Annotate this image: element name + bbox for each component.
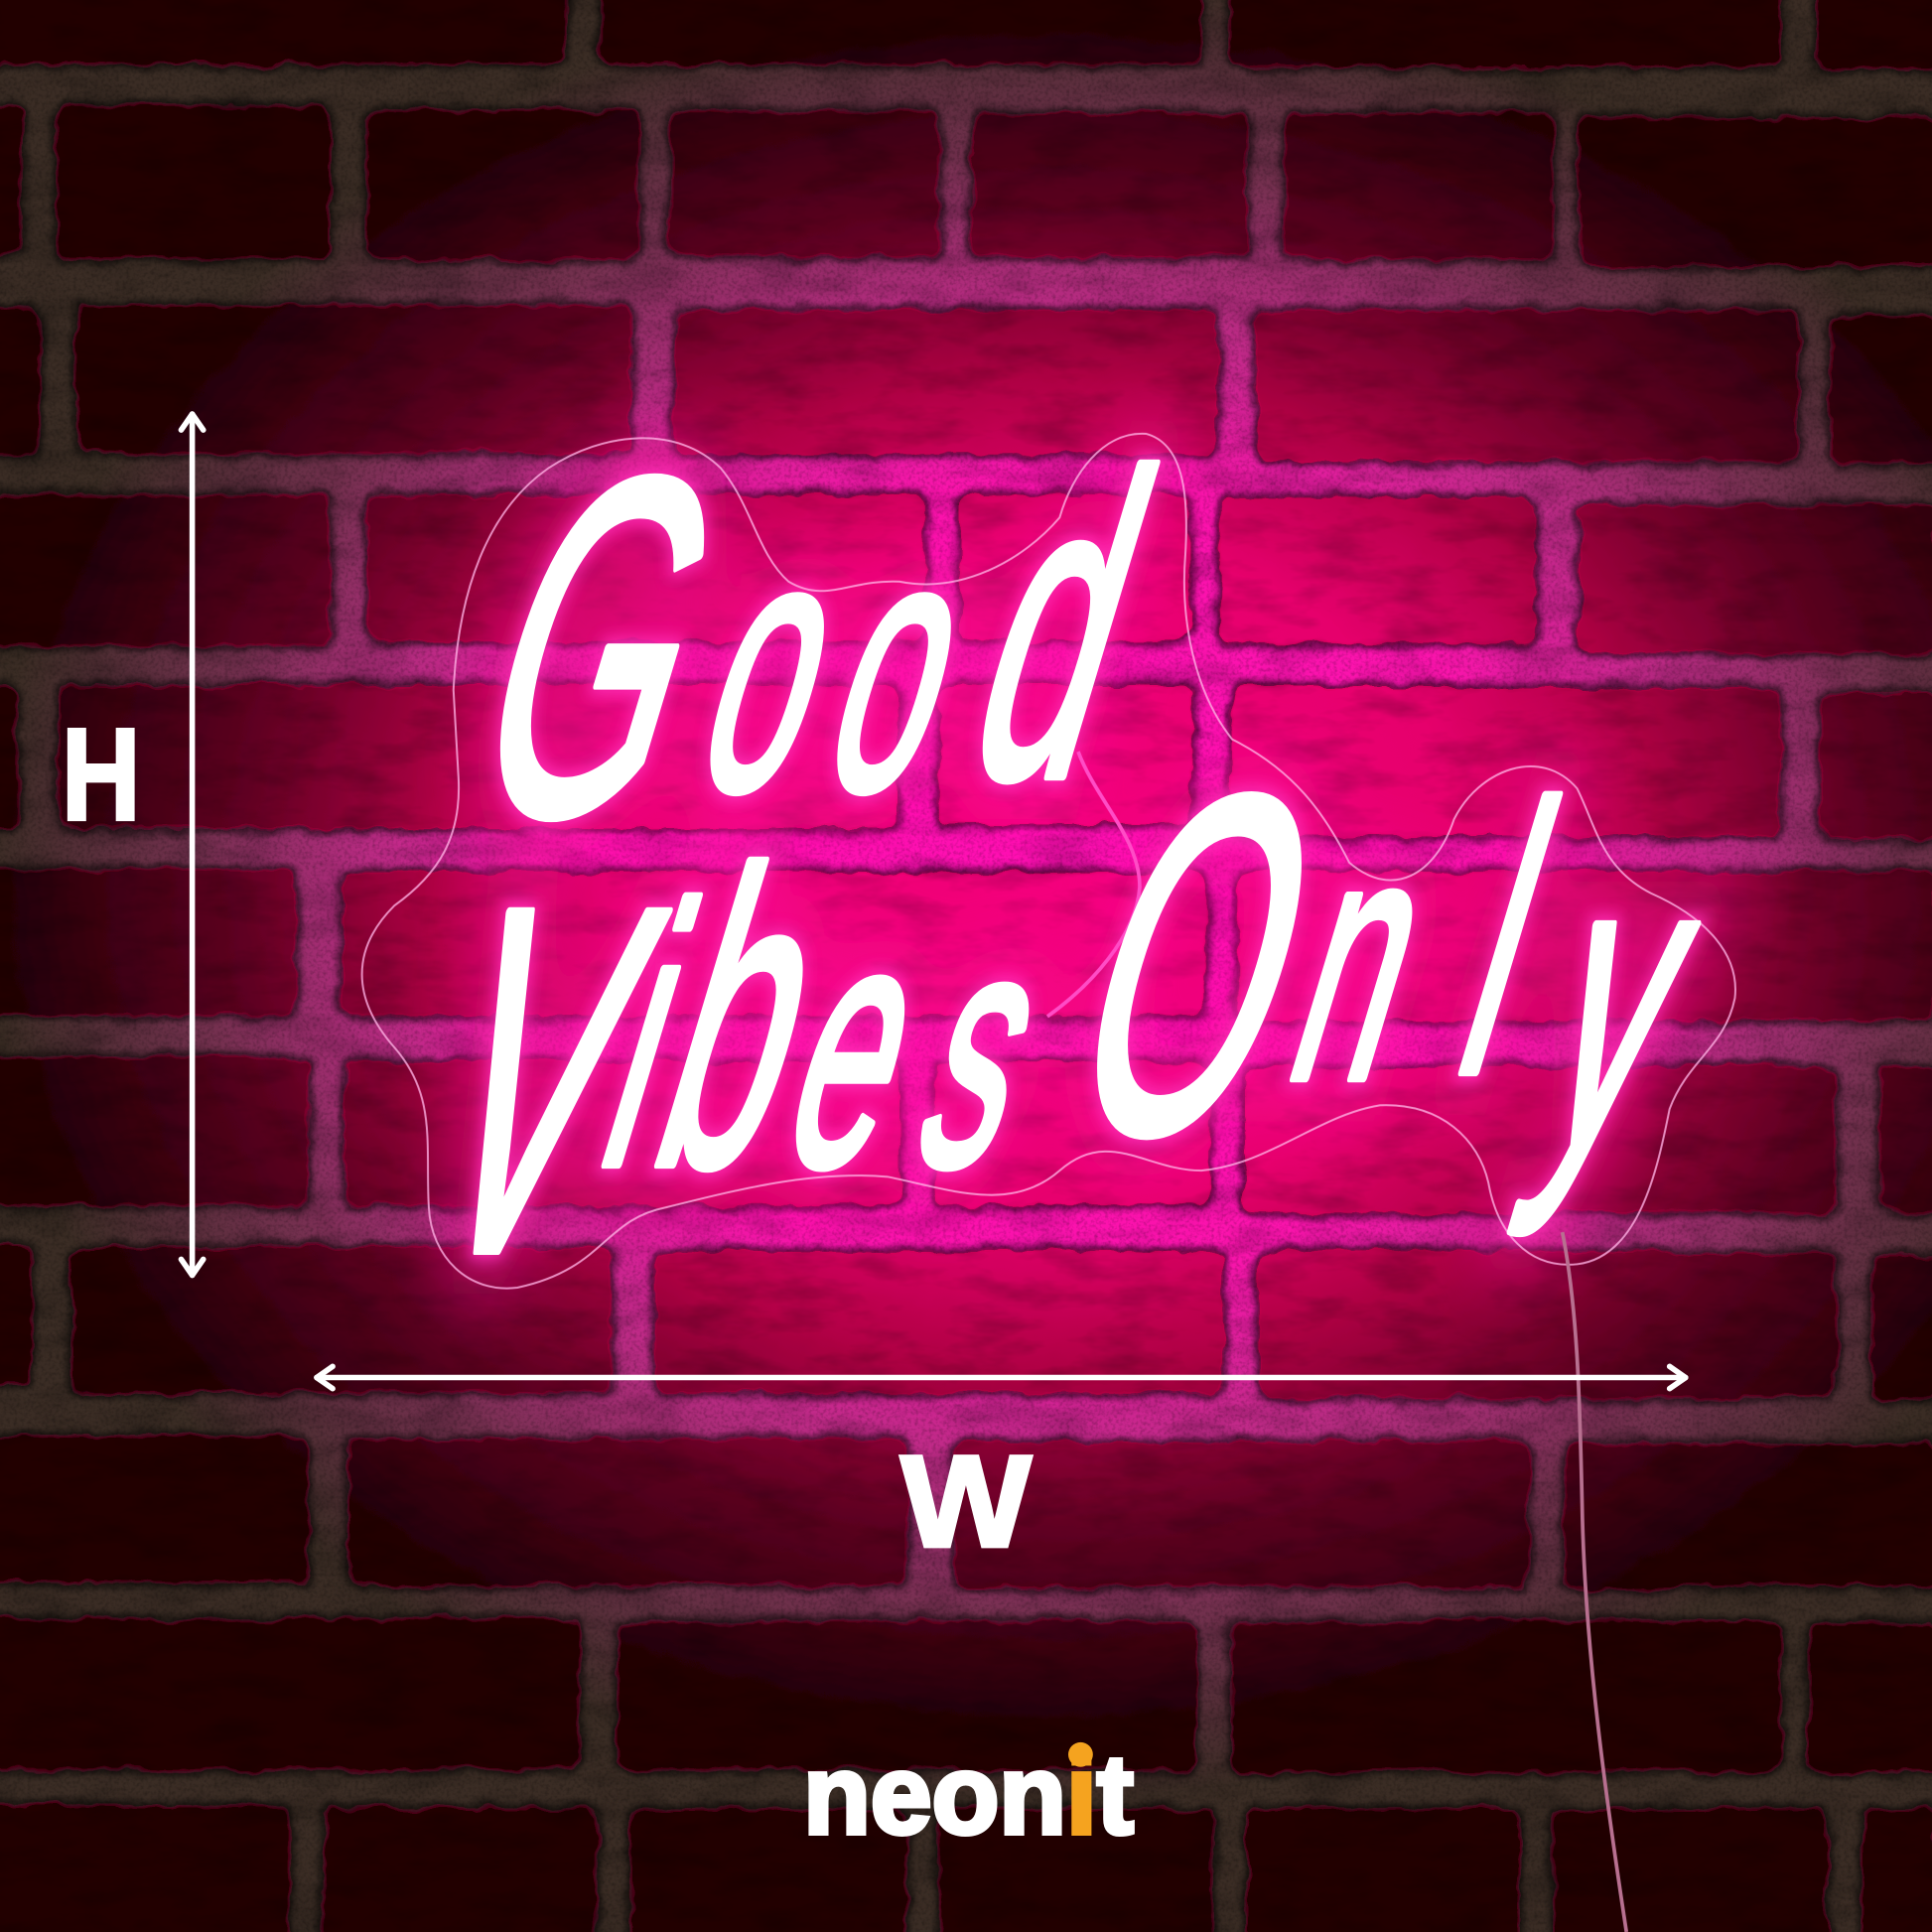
word: Vibes: V	[373, 805, 705, 1356]
height label: H	[62, 701, 140, 847]
neon glow wide: o	[792, 466, 1012, 865]
neon glow wide: o	[666, 466, 885, 865]
neon glow tight: G	[428, 378, 776, 915]
word: Only: O	[1026, 696, 1374, 1233]
width dimension arrow	[317, 1366, 1686, 1389]
neon glow wide	[373, 378, 1767, 1356]
neon glow wide: y	[1500, 767, 1746, 1238]
acrylic backing outline	[362, 434, 1735, 1289]
neon glow tight: o	[792, 466, 1012, 865]
neon glow wide: b	[617, 786, 874, 1254]
word: Good: o	[666, 466, 885, 865]
word: Vibes: i	[568, 830, 733, 1243]
neon glow tight: n	[1258, 767, 1469, 1152]
neon glow tight: l	[1424, 727, 1593, 1154]
neon glow tight: b	[617, 786, 874, 1254]
word: Good: d	[931, 387, 1195, 869]
word: Only: y	[1500, 767, 1746, 1238]
neon glow wide: e	[753, 854, 964, 1238]
neon glow tight: d	[931, 387, 1195, 869]
neon glow tight: e	[753, 854, 964, 1238]
neon glow wide: s	[887, 865, 1081, 1236]
power wires	[1047, 752, 1626, 1932]
word: Vibes: b	[617, 786, 874, 1254]
neon glow wide: n	[1258, 767, 1469, 1152]
neon glow wide: l	[1424, 727, 1593, 1154]
height dimension arrow	[181, 414, 204, 1276]
neon glow wide: d	[931, 387, 1195, 869]
neon glow wide: i	[568, 830, 733, 1243]
neon glow tight: y	[1500, 767, 1746, 1238]
neon glow wide: G	[428, 378, 776, 915]
neon glow tight: o	[666, 466, 885, 865]
width label: W	[900, 1429, 1033, 1575]
word: Vibes: e	[753, 854, 964, 1238]
neon glow tight: V	[373, 805, 705, 1356]
word: Vibes: s	[887, 865, 1081, 1236]
neon glow wide: V	[373, 805, 705, 1356]
word: Only: l	[1424, 727, 1593, 1154]
neon glow tight: i	[568, 830, 733, 1243]
neon glow tight: s	[887, 865, 1081, 1236]
neon glow wide: O	[1026, 696, 1374, 1233]
word: Only: n	[1258, 767, 1469, 1152]
neon glow tight: O	[1026, 696, 1374, 1233]
logo: neonit: neonit	[803, 1732, 1134, 1858]
word: Good: o	[792, 466, 1012, 865]
neon lettering: Good Vibes Only	[373, 378, 1767, 1356]
neon glow tight	[373, 378, 1767, 1356]
word: Good: G	[428, 378, 776, 915]
